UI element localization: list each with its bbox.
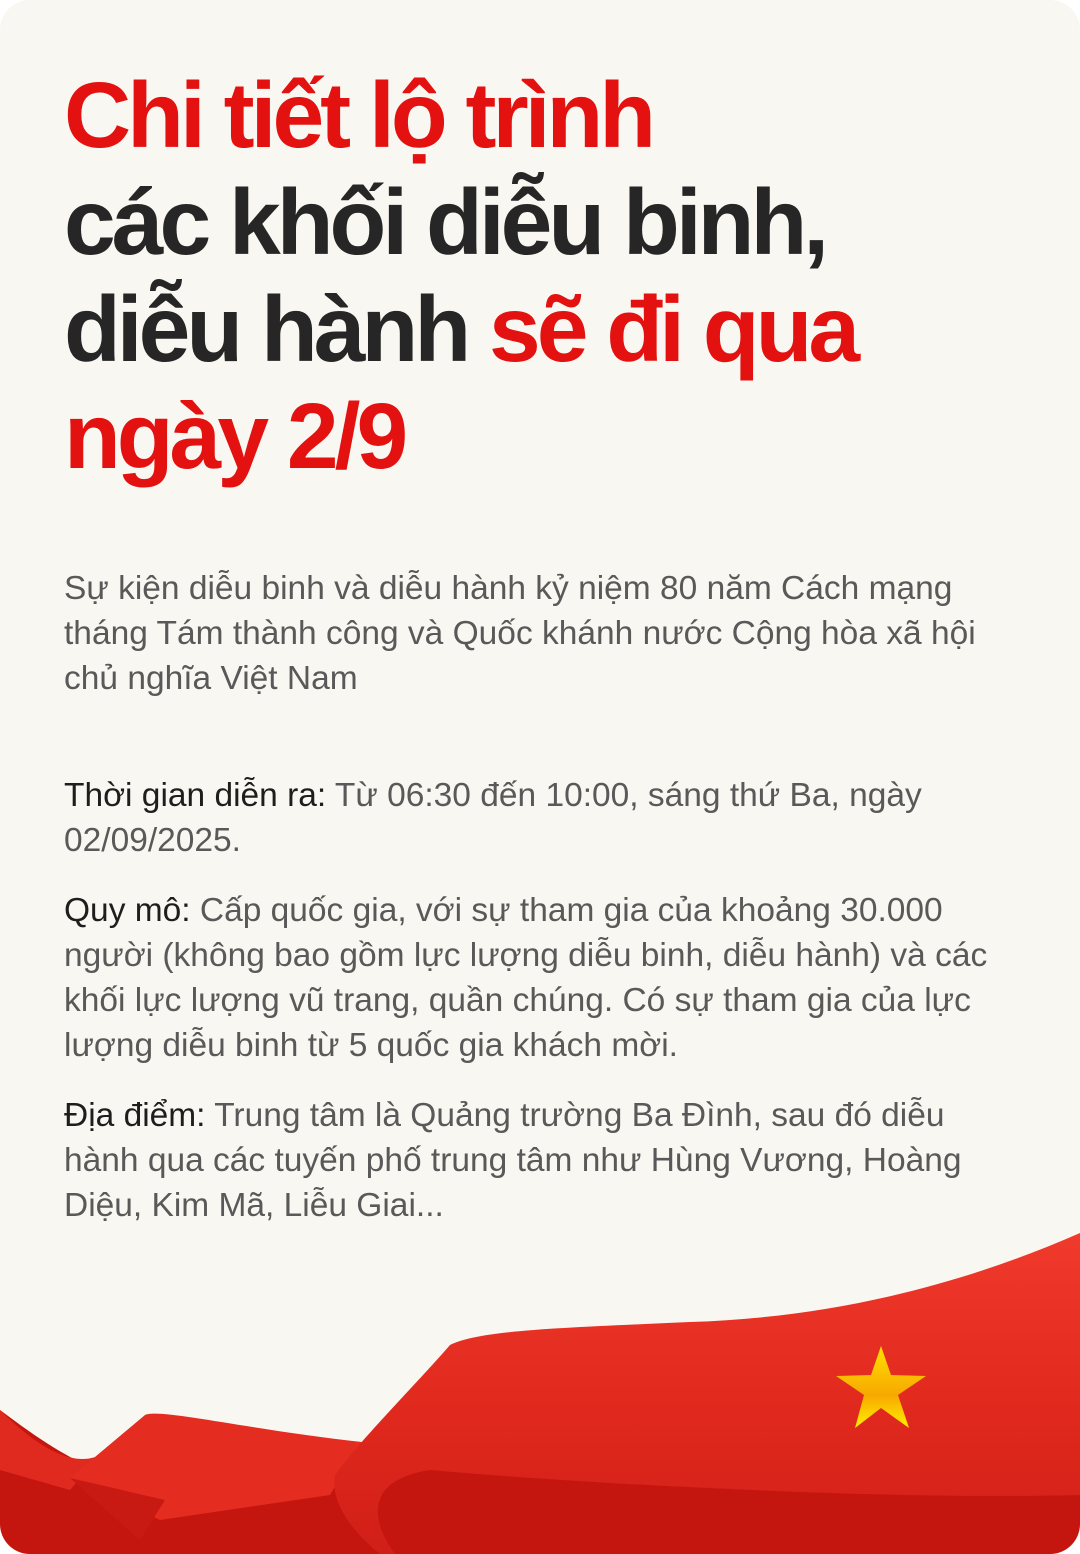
title: diễu hành sẽ đi qua <box>64 277 856 381</box>
intro text: tháng Tám thành công và Quốc khánh nước Cộng hòa xã hội <box>64 615 976 652</box>
icon: star <box>836 1346 926 1428</box>
scale info: Quy mô: Cấp quốc gia, với sự tham gia của khoảng 30.000 <box>64 892 943 929</box>
time info: 02/09/2025. <box>64 822 241 859</box>
intro text: chủ nghĩa Việt Nam <box>64 660 358 697</box>
title: các khối diễu binh, <box>64 170 825 274</box>
title: ngày 2/9 <box>64 384 404 488</box>
location info: hành qua các tuyến phố trung tâm như Hùng Vương, Hoàng <box>64 1142 961 1179</box>
scale info: khối lực lượng vũ trang, quần chúng. Có sự tham gia của lực <box>64 982 971 1019</box>
time info <box>64 777 922 859</box>
location info: Địa điểm: Trung tâm là Quảng trường Ba Đình, sau đó diễu <box>64 1097 945 1134</box>
scale info <box>64 892 987 1064</box>
location info: Diệu, Kim Mã, Liễu Giai... <box>64 1187 444 1224</box>
title <box>64 63 861 488</box>
intro text <box>64 570 976 697</box>
scale info: lượng diễu binh từ 5 quốc gia khách mời. <box>64 1027 678 1064</box>
intro text: Sự kiện diễu binh và diễu hành kỷ niệm 80 năm Cách mạng <box>64 570 952 607</box>
title: Chi tiết lộ trình <box>64 63 652 167</box>
flag illustration <box>0 1233 1080 1554</box>
location info <box>64 1097 961 1224</box>
time info: Thời gian diễn ra: Từ 06:30 đến 10:00, sáng thứ Ba, ngày <box>64 777 922 814</box>
scale info: người (không bao gồm lực lượng diễu binh, diễu hành) và các <box>64 937 987 974</box>
